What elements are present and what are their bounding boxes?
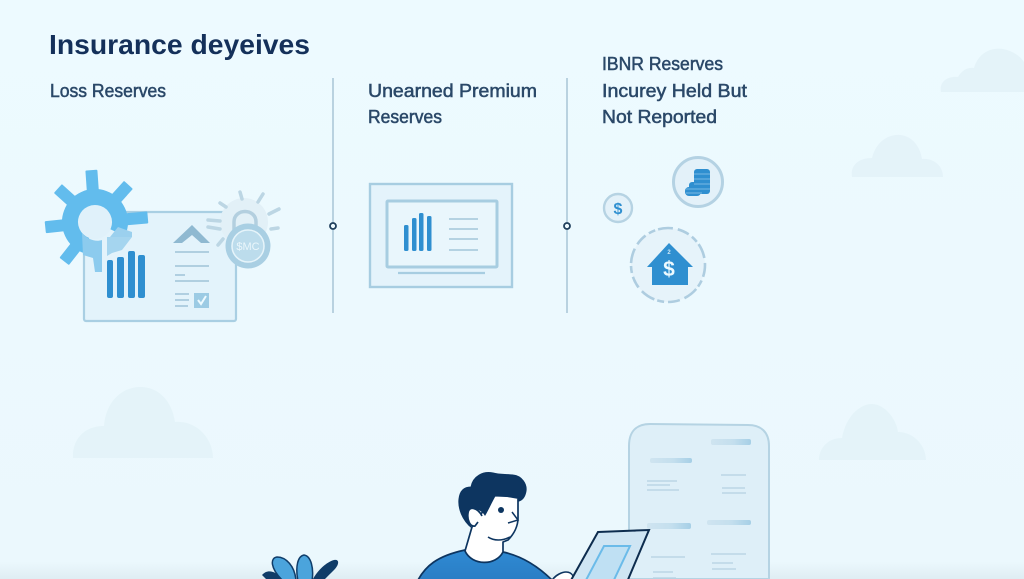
icon: lock with sun rays bbox=[208, 192, 279, 268]
illustration: report sheet bbox=[629, 424, 769, 579]
illustration: IBNR icons bbox=[604, 158, 722, 302]
text lines bbox=[175, 252, 209, 306]
illustration: plant bbox=[262, 555, 338, 579]
text lines bbox=[449, 219, 478, 250]
blurred bars bbox=[647, 439, 751, 529]
icon: checkbox bbox=[194, 293, 209, 308]
hand bbox=[553, 572, 573, 579]
nose bbox=[508, 512, 518, 523]
heading: IBNR reserves bbox=[602, 54, 747, 127]
bar chart bbox=[404, 213, 432, 251]
icon: gear bbox=[45, 170, 148, 272]
screen bbox=[387, 201, 497, 267]
icon: house roof bbox=[173, 225, 210, 243]
hair bbox=[459, 473, 526, 528]
text lines bbox=[647, 475, 746, 578]
icon: house with dollar: $ bbox=[663, 258, 675, 281]
icon: house with dollar: 2 bbox=[667, 250, 671, 256]
heading: unearned premium reserves: Unearned Premium bbox=[368, 81, 537, 101]
heading: unearned premium reserves bbox=[368, 81, 537, 127]
eye bbox=[498, 507, 504, 513]
illustration: loss reserves document with gear and lock bbox=[45, 170, 279, 321]
illustration: person with tablet bbox=[417, 473, 649, 579]
heading: loss reserves: Loss Reserves bbox=[50, 81, 166, 101]
heading: IBNR reserves: Incurey Held But bbox=[602, 81, 747, 101]
icon: house with dollar bbox=[631, 228, 705, 302]
divider with node: right bbox=[564, 78, 570, 313]
mouth bbox=[488, 537, 510, 540]
bar chart bbox=[107, 251, 145, 298]
document card bbox=[84, 212, 236, 321]
icon: dollar coin: $ bbox=[614, 201, 623, 218]
icon: dollar coin bbox=[604, 194, 632, 222]
heading: IBNR reserves: IBNR Reserves bbox=[602, 54, 723, 74]
heading: unearned premium reserves: Reserves bbox=[368, 107, 442, 127]
cloud: top right bbox=[941, 49, 1024, 92]
icon: lock with sun rays: $MC bbox=[236, 241, 260, 253]
cloud: lower right bbox=[819, 404, 926, 460]
icon: coin stack bbox=[674, 158, 722, 206]
shirt bbox=[417, 550, 553, 579]
cloud: lower left bbox=[73, 387, 213, 458]
illustration: unearned premium monitor bbox=[370, 184, 512, 287]
tablet bbox=[570, 530, 649, 579]
title: Insurance deyeives bbox=[49, 29, 310, 60]
ear bbox=[468, 508, 482, 526]
heading: IBNR reserves: Not Reported bbox=[602, 107, 717, 127]
divider with node: left bbox=[330, 78, 336, 313]
neck and face bbox=[465, 494, 518, 562]
monitor stand line bbox=[398, 272, 485, 274]
cloud: upper right bbox=[852, 135, 943, 177]
